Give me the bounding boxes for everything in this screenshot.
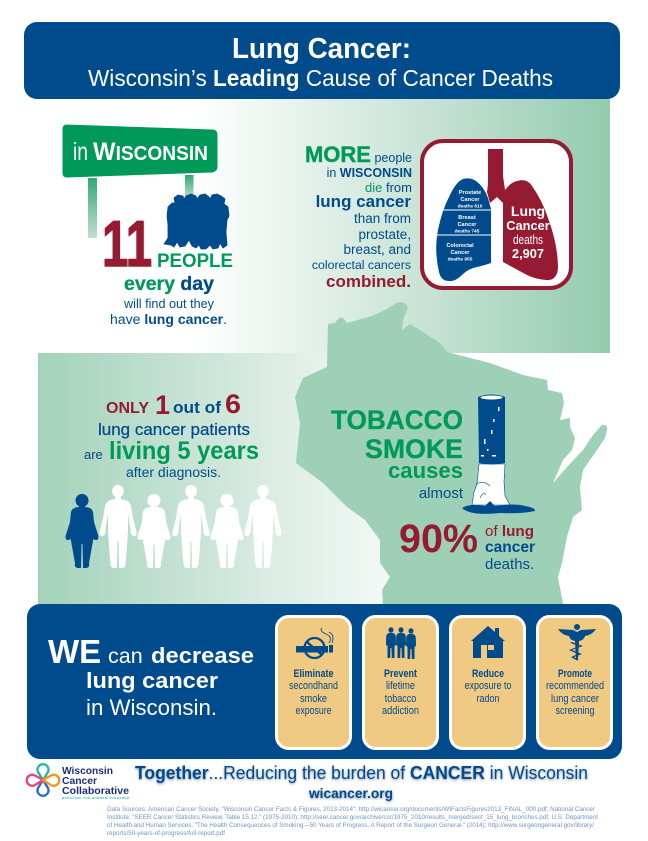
text: more people die from lung cancer: colorectal cancers bbox=[312, 258, 411, 272]
text: more people die from lung cancer: MORE people bbox=[305, 142, 412, 167]
card: promote lung cancer screening: lung cancer bbox=[551, 693, 599, 705]
lung: lung cancer deaths: 2,907 bbox=[512, 246, 544, 261]
card: promote lung cancer screening: screening bbox=[556, 705, 594, 717]
text: only 1 out of 6: out of bbox=[173, 398, 221, 417]
card: prevent lifetime tobacco addiction bbox=[364, 616, 438, 748]
logo: Wisconsin Cancer Collaborative: Collaborative bbox=[62, 786, 129, 797]
stat: 90% of lung cancer deaths: cancer bbox=[485, 539, 535, 556]
lung: other cancers: deaths 745 bbox=[455, 228, 480, 234]
text: only 1 out of 6: living 5 years bbox=[109, 437, 259, 465]
tagline: together reducing the burden of cancer: Together...Reducing the burden of CANCER in Wisconsin bbox=[135, 764, 588, 784]
panel: we can decrease lung cancer: in Wisconsin. bbox=[86, 695, 217, 720]
lung: other cancers: Prostate bbox=[459, 190, 481, 196]
stat: 90% of lung cancer deaths: of lung bbox=[485, 524, 534, 540]
text: more people die from lung cancer: die from bbox=[365, 180, 412, 195]
panel: top gradient background bbox=[38, 99, 610, 353]
lung: lung cancer deaths: Cancer bbox=[506, 218, 550, 233]
logo: Wisconsin Cancer Collaborative bbox=[27, 764, 130, 800]
panel: we can decrease lung cancer: WE bbox=[48, 633, 101, 670]
text: only 1 out of 6: lung cancer patients bbox=[98, 421, 250, 439]
title: Lung Cancer: bbox=[232, 33, 411, 65]
logo: Wisconsin Cancer Collaborative: Cancer bbox=[62, 776, 97, 787]
text: tobacco smoke causes almost bbox=[331, 405, 464, 502]
text: more people die from lung cancer: lung cancer bbox=[316, 192, 411, 211]
text: tobacco smoke causes almost: TOBACCO bbox=[331, 405, 463, 435]
website: wicancer.org bbox=[308, 787, 393, 802]
lung: lung cancer deaths: Lung bbox=[511, 203, 545, 219]
lung: other cancers: Colorectal bbox=[446, 243, 474, 249]
text: tobacco smoke causes almost: SMOKE bbox=[365, 434, 463, 464]
Wisconsin state map bbox=[295, 302, 607, 604]
text: more people die from lung cancer: prostate, bbox=[358, 227, 411, 242]
lung: other cancers: Cancer bbox=[458, 222, 477, 228]
lung: lung cancer deaths: deaths bbox=[513, 233, 543, 247]
card: reduce radon exposure: exposure to bbox=[464, 680, 512, 692]
chart: lungs comparison card bbox=[422, 141, 571, 288]
stat: 11 people bbox=[102, 207, 233, 281]
lung: other cancers: deaths 610 bbox=[458, 204, 483, 210]
card: reduce radon exposure bbox=[450, 616, 524, 748]
data sources footnote: Institute. “SEER Cancer Statistics Review, Table 15.12.” (1975-2010); http://seer.cancer.gov/archive/csr/1975_2010/results_merged/sect_15_lung_bronchus.pdf; U.S. Department bbox=[107, 814, 598, 821]
text: every day: every day bbox=[124, 273, 214, 295]
text: more people die from lung cancer: than from bbox=[354, 211, 411, 226]
icon: stubbed cigarette bbox=[462, 394, 535, 514]
text: only 1 out of 6: are bbox=[84, 447, 103, 462]
subtitle: Wisconsin’s Leading Cause of Cancer Deaths bbox=[88, 65, 553, 91]
card: eliminate secondhand smoke: secondhand bbox=[289, 680, 338, 692]
road sign: in Wisconsin bbox=[62, 124, 218, 238]
card: eliminate secondhand smoke: exposure bbox=[296, 705, 332, 717]
header banner bbox=[24, 22, 620, 99]
lung: other cancers: Cancer bbox=[461, 197, 480, 203]
stat: 11 people: 11 bbox=[103, 208, 153, 281]
panel: we can decrease lung cancer: can bbox=[108, 644, 143, 668]
data sources footnote bbox=[107, 806, 598, 837]
icon: three teenagers bbox=[386, 627, 416, 659]
text: every day: will find out they bbox=[123, 296, 214, 311]
data sources footnote: reports/50-years-of-progress/full-report.pdf bbox=[107, 830, 225, 837]
lung: other cancers: Cancer bbox=[451, 250, 470, 256]
text: more people die from lung cancer: combined. bbox=[326, 272, 411, 291]
card: eliminate secondhand smoke: Eliminate bbox=[294, 668, 334, 680]
lung: other cancers: deaths 955 bbox=[448, 256, 473, 262]
text: only 1 out of 6: 6 bbox=[225, 389, 241, 419]
icon: no smoking bbox=[296, 628, 333, 658]
card: reduce radon exposure: radon bbox=[476, 693, 500, 705]
text: every day bbox=[110, 273, 227, 327]
card: eliminate secondhand smoke: smoke bbox=[300, 693, 327, 705]
card: eliminate secondhand smoke bbox=[276, 616, 350, 748]
tagline: together reducing the burden of cancer: Together...Reducing the burden of CANCER in Wisconsin bbox=[135, 763, 588, 783]
panel: we can decrease lung cancer: lung cancer bbox=[86, 668, 218, 693]
panel: bottom gradient background bbox=[38, 353, 610, 604]
lung: lung cancer deaths bbox=[487, 149, 558, 280]
text: only 1 out of 6: 1 bbox=[155, 390, 170, 420]
icon: group of people silhouette bbox=[164, 194, 229, 249]
card: prevent lifetime tobacco addiction: lifetime bbox=[386, 680, 415, 692]
card: promote lung cancer screening: Promote bbox=[558, 668, 592, 680]
text: more people die from lung cancer: in WISCONSIN bbox=[327, 166, 412, 180]
stat: 90% of lung cancer deaths: deaths. bbox=[485, 556, 534, 573]
card: prevent lifetime tobacco addiction: addiction bbox=[382, 705, 419, 717]
data sources footnote: of Health and Human Services. “The Health Consequences of Smoking—50 Years of Progress. A Report of the Surgeon General.” (2014); http://www.surgeongeneral.gov/library/ bbox=[107, 822, 594, 829]
lung: other cancers bbox=[436, 178, 492, 281]
stat: 11 people: 11 bbox=[102, 207, 152, 280]
stat: 90% of lung cancer deaths bbox=[399, 517, 535, 573]
panel: we can decrease lung cancer bbox=[27, 604, 622, 759]
card: promote lung cancer screening: recommended bbox=[546, 680, 604, 692]
stat: 11 people: PEOPLE bbox=[157, 251, 233, 272]
panel: we can decrease lung cancer: decrease bbox=[151, 643, 254, 668]
text: only 1 out of 6: ONLY bbox=[106, 400, 150, 417]
logo: Wisconsin Cancer Collaborative: REDUCING THE BURDEN TOGETHER bbox=[62, 796, 130, 800]
card: prevent lifetime tobacco addiction: tobacco bbox=[385, 693, 416, 705]
icon: house bbox=[471, 626, 505, 658]
card: prevent lifetime tobacco addiction: Prevent bbox=[384, 668, 417, 680]
card: promote lung cancer screening bbox=[538, 616, 612, 748]
text: tobacco smoke causes almost: almost bbox=[419, 485, 464, 502]
card: reduce radon exposure: Reduce bbox=[472, 668, 504, 680]
road sign: in Wisconsin: WISCONSIN bbox=[93, 138, 208, 166]
icon: caduceus bbox=[558, 624, 596, 660]
text: more people die from lung cancer: breast, and bbox=[343, 242, 411, 257]
logo: Wisconsin Cancer Collaborative: Wisconsin bbox=[62, 766, 113, 777]
text: tobacco smoke causes almost: causes bbox=[388, 458, 463, 483]
road sign: in Wisconsin: in bbox=[73, 138, 88, 166]
text: only 1 out of 6 bbox=[84, 389, 259, 480]
data sources footnote: Data Sources: American Cancer Society. “Wisconsin Cancer Facts & Figures, 2013-2014”; http://wicancer.org/documents/WIFactsFigures2013_FINAL_000.pdf; National Cancer bbox=[107, 806, 595, 813]
text: more people die from lung cancer bbox=[305, 142, 412, 291]
text: only 1 out of 6: after diagnosis. bbox=[126, 464, 221, 480]
website: wicancer.org bbox=[308, 786, 393, 801]
icon: six human figures, one in six highlighted bbox=[66, 485, 282, 568]
lung: other cancers: Breast bbox=[458, 215, 476, 221]
stat: 90% of lung cancer deaths: 90% bbox=[399, 517, 478, 561]
text: every day: have lung cancer. bbox=[110, 312, 227, 327]
